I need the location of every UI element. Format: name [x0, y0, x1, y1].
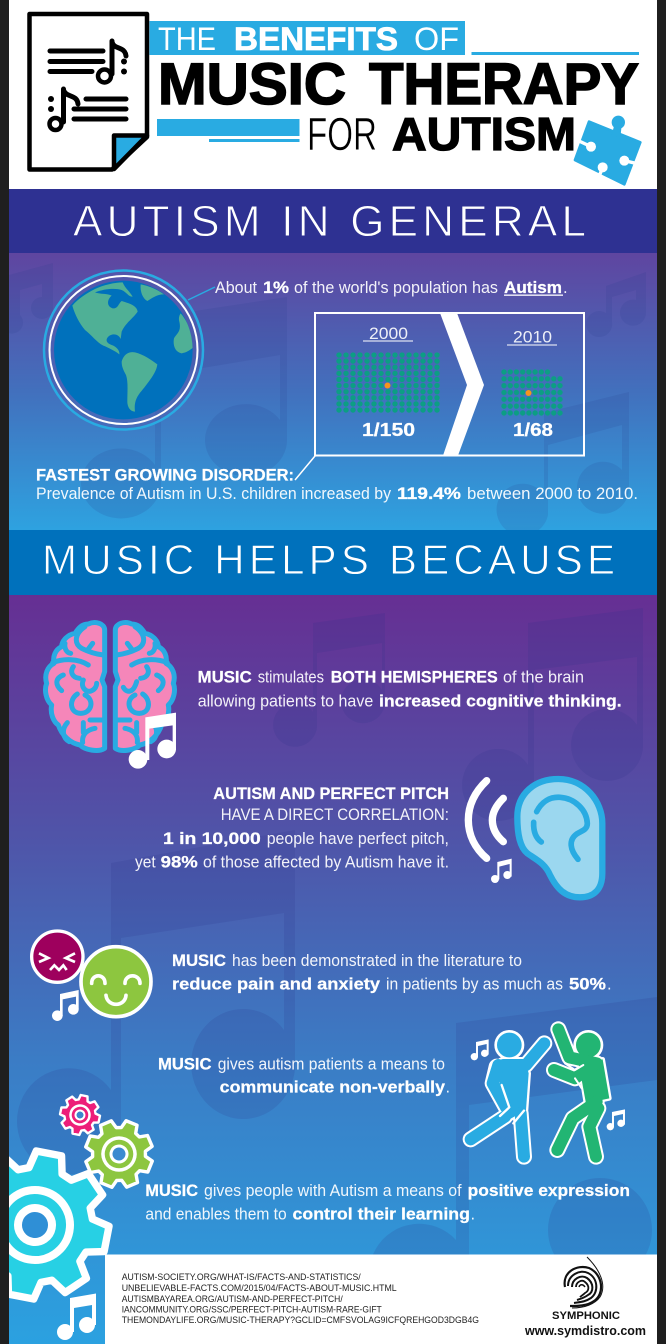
- text: pain and anxiety: [172, 952, 612, 993]
- text: both hemispheres: BOTH HEMISPHERES: [331, 669, 498, 687]
- gear: cyan: [9, 1147, 113, 1303]
- text: positive expression: .: [470, 1205, 475, 1223]
- text: pain and anxiety: MUSIC: [172, 952, 226, 970]
- music note right: [607, 1109, 625, 1130]
- brand text: www.symdistro.com: [524, 1324, 646, 1338]
- text: positive expression: gives people with Autism a means of: [204, 1182, 462, 1200]
- gear: green: [75, 1110, 163, 1198]
- text: perfect pitch: HAVE A DIRECT CORRELATION:: [221, 806, 449, 824]
- callout: fastest growing disorder: 119.4%: [397, 485, 461, 503]
- text: positive expression: and enables them to: [145, 1205, 287, 1223]
- icon: music note bottom left: [57, 1294, 96, 1340]
- brand text: SYMPHONIC: [552, 1310, 620, 1322]
- callout: fastest growing disorder: between 2000 to 2010.: [467, 485, 638, 503]
- icon: globe: [44, 270, 203, 430]
- section header: autism in general: [9, 189, 657, 253]
- background music notes: [17, 608, 657, 1324]
- icon: dancers: [471, 1029, 625, 1157]
- callout: world population: 1%: [263, 279, 289, 297]
- section header: autism in general: AUTISM IN GENERAL: [73, 197, 586, 246]
- icon: faces: [32, 931, 151, 1021]
- title: AUTISM: [392, 108, 576, 160]
- text: perfect pitch: AUTISM AND PERFECT PITCH: [213, 785, 449, 803]
- text: both hemispheres: increased cognitive thinking.: [379, 693, 622, 711]
- background music notes: [1, 263, 646, 536]
- title: FOR: [307, 108, 377, 160]
- music note: [52, 990, 79, 1021]
- sources: THEMONDAYLIFE.ORG/MUSIC-THERAPY?GCLID=CMFSVOLAG9ICFQREHGOD3DGB4G: [122, 1315, 479, 1326]
- text: both hemispheres: allowing patients to have: [198, 693, 373, 711]
- text: pain and anxiety: in patients by as much as: [386, 975, 563, 993]
- year 2010 dot grid: 2010: [513, 328, 552, 347]
- text: communicate non-verbally: [158, 1055, 450, 1097]
- text: pain and anxiety: .: [607, 975, 612, 993]
- callout: world population: [188, 279, 568, 300]
- callout: world population: of the world's population has: [294, 279, 498, 297]
- text: positive expression: [145, 1182, 630, 1223]
- panel: music helps background: [9, 595, 657, 1344]
- year 2000 dot grid: 1/150: [362, 420, 415, 440]
- text: perfect pitch: 98%: [161, 854, 198, 872]
- text: communicate non-verbally: gives autism patients a means to: [218, 1055, 445, 1073]
- year 2010 dot grid: [501, 328, 563, 440]
- text: communicate non-verbally: .: [446, 1079, 450, 1097]
- callout: world population: Autism: [504, 279, 562, 297]
- text: positive expression: MUSIC: [145, 1182, 198, 1200]
- dancer: green: [554, 1029, 609, 1157]
- music note: [129, 713, 176, 769]
- icon: gears: [9, 1094, 154, 1303]
- text: pain and anxiety: has been demonstrated in the literature to: [232, 952, 522, 970]
- icon: sheet music document: [30, 14, 147, 170]
- text: perfect pitch: of those affected by Autism have it.: [203, 854, 449, 872]
- sources: UNBELIEVABLE-FACTS.COM/2015/04/FACTS-ABOUT-MUSIC.HTML: [122, 1283, 397, 1294]
- title: MUSIC: [158, 52, 346, 117]
- text: perfect pitch: 1 in 10,000: [163, 830, 261, 848]
- icon: brain with music note: [45, 623, 176, 769]
- text: positive expression: control their learning: [292, 1205, 470, 1223]
- music note: [491, 859, 512, 883]
- dancer: blue: [471, 1031, 544, 1157]
- section header: music helps because: MUSIC HELPS BECAUSE: [42, 536, 615, 583]
- sources: [122, 1272, 479, 1326]
- sources: AUTISM-SOCIETY.ORG/WHAT-IS/FACTS-AND-STATISTICS/: [122, 1272, 361, 1283]
- callout: fastest growing disorder: FASTEST GROWING DISORDER:: [36, 466, 294, 484]
- text: pain and anxiety: reduce pain and anxiety: [172, 975, 381, 993]
- text: perfect pitch: yet: [135, 854, 156, 872]
- text: perfect pitch: people have perfect pitch,: [267, 830, 449, 848]
- callout: world population: About: [215, 279, 257, 297]
- panel: footer: [105, 1254, 657, 1344]
- callout: fastest growing disorder: [36, 456, 638, 503]
- sources: IANCOMMUNITY.ORG/SSC/PERFECT-PITCH-AUTISM-RARE-GIFT: [122, 1304, 382, 1316]
- icon: ear with sound waves: [468, 779, 602, 897]
- title: OF: [414, 21, 459, 57]
- section header: music helps because: [9, 530, 657, 595]
- icon: puzzle piece: [575, 116, 640, 184]
- text: both hemispheres: MUSIC: [198, 669, 252, 687]
- gear: pink: [57, 1092, 103, 1138]
- text: pain and anxiety: 50%: [569, 975, 606, 993]
- text: both hemispheres: stimulates: [258, 669, 324, 687]
- title: THERAPY: [369, 52, 639, 117]
- year 2010 dot grid: 1/68: [513, 420, 553, 440]
- title: [150, 21, 639, 160]
- music note left: [471, 1039, 489, 1060]
- text: communicate non-verbally: MUSIC: [158, 1055, 212, 1073]
- text: communicate non-verbally: communicate non-verbally: [220, 1079, 446, 1097]
- text: positive expression: positive expression: [468, 1182, 630, 1200]
- text: perfect pitch: [135, 785, 449, 872]
- title: BENEFITS: [234, 21, 398, 57]
- callout: fastest growing disorder: Prevalence of Autism in U.S. children increased by: [36, 485, 392, 503]
- callout: world population: .: [563, 279, 568, 297]
- panel: autism in general background: [1, 253, 657, 536]
- title: THE: [158, 21, 216, 57]
- panel: prevalence comparison box: [315, 313, 584, 456]
- brand text: [524, 1310, 646, 1338]
- text: both hemispheres: [198, 669, 622, 711]
- logo: symphonic: [565, 1257, 603, 1308]
- sources: AUTISMBAYAREA.ORG/AUTISM-AND-PERFECT-PITCH/: [122, 1294, 343, 1305]
- arrow chevron: [440, 313, 484, 456]
- text: both hemispheres: of the brain: [503, 669, 584, 687]
- year 2000 dot grid: [336, 324, 441, 440]
- year 2000 dot grid: 2000: [369, 324, 408, 343]
